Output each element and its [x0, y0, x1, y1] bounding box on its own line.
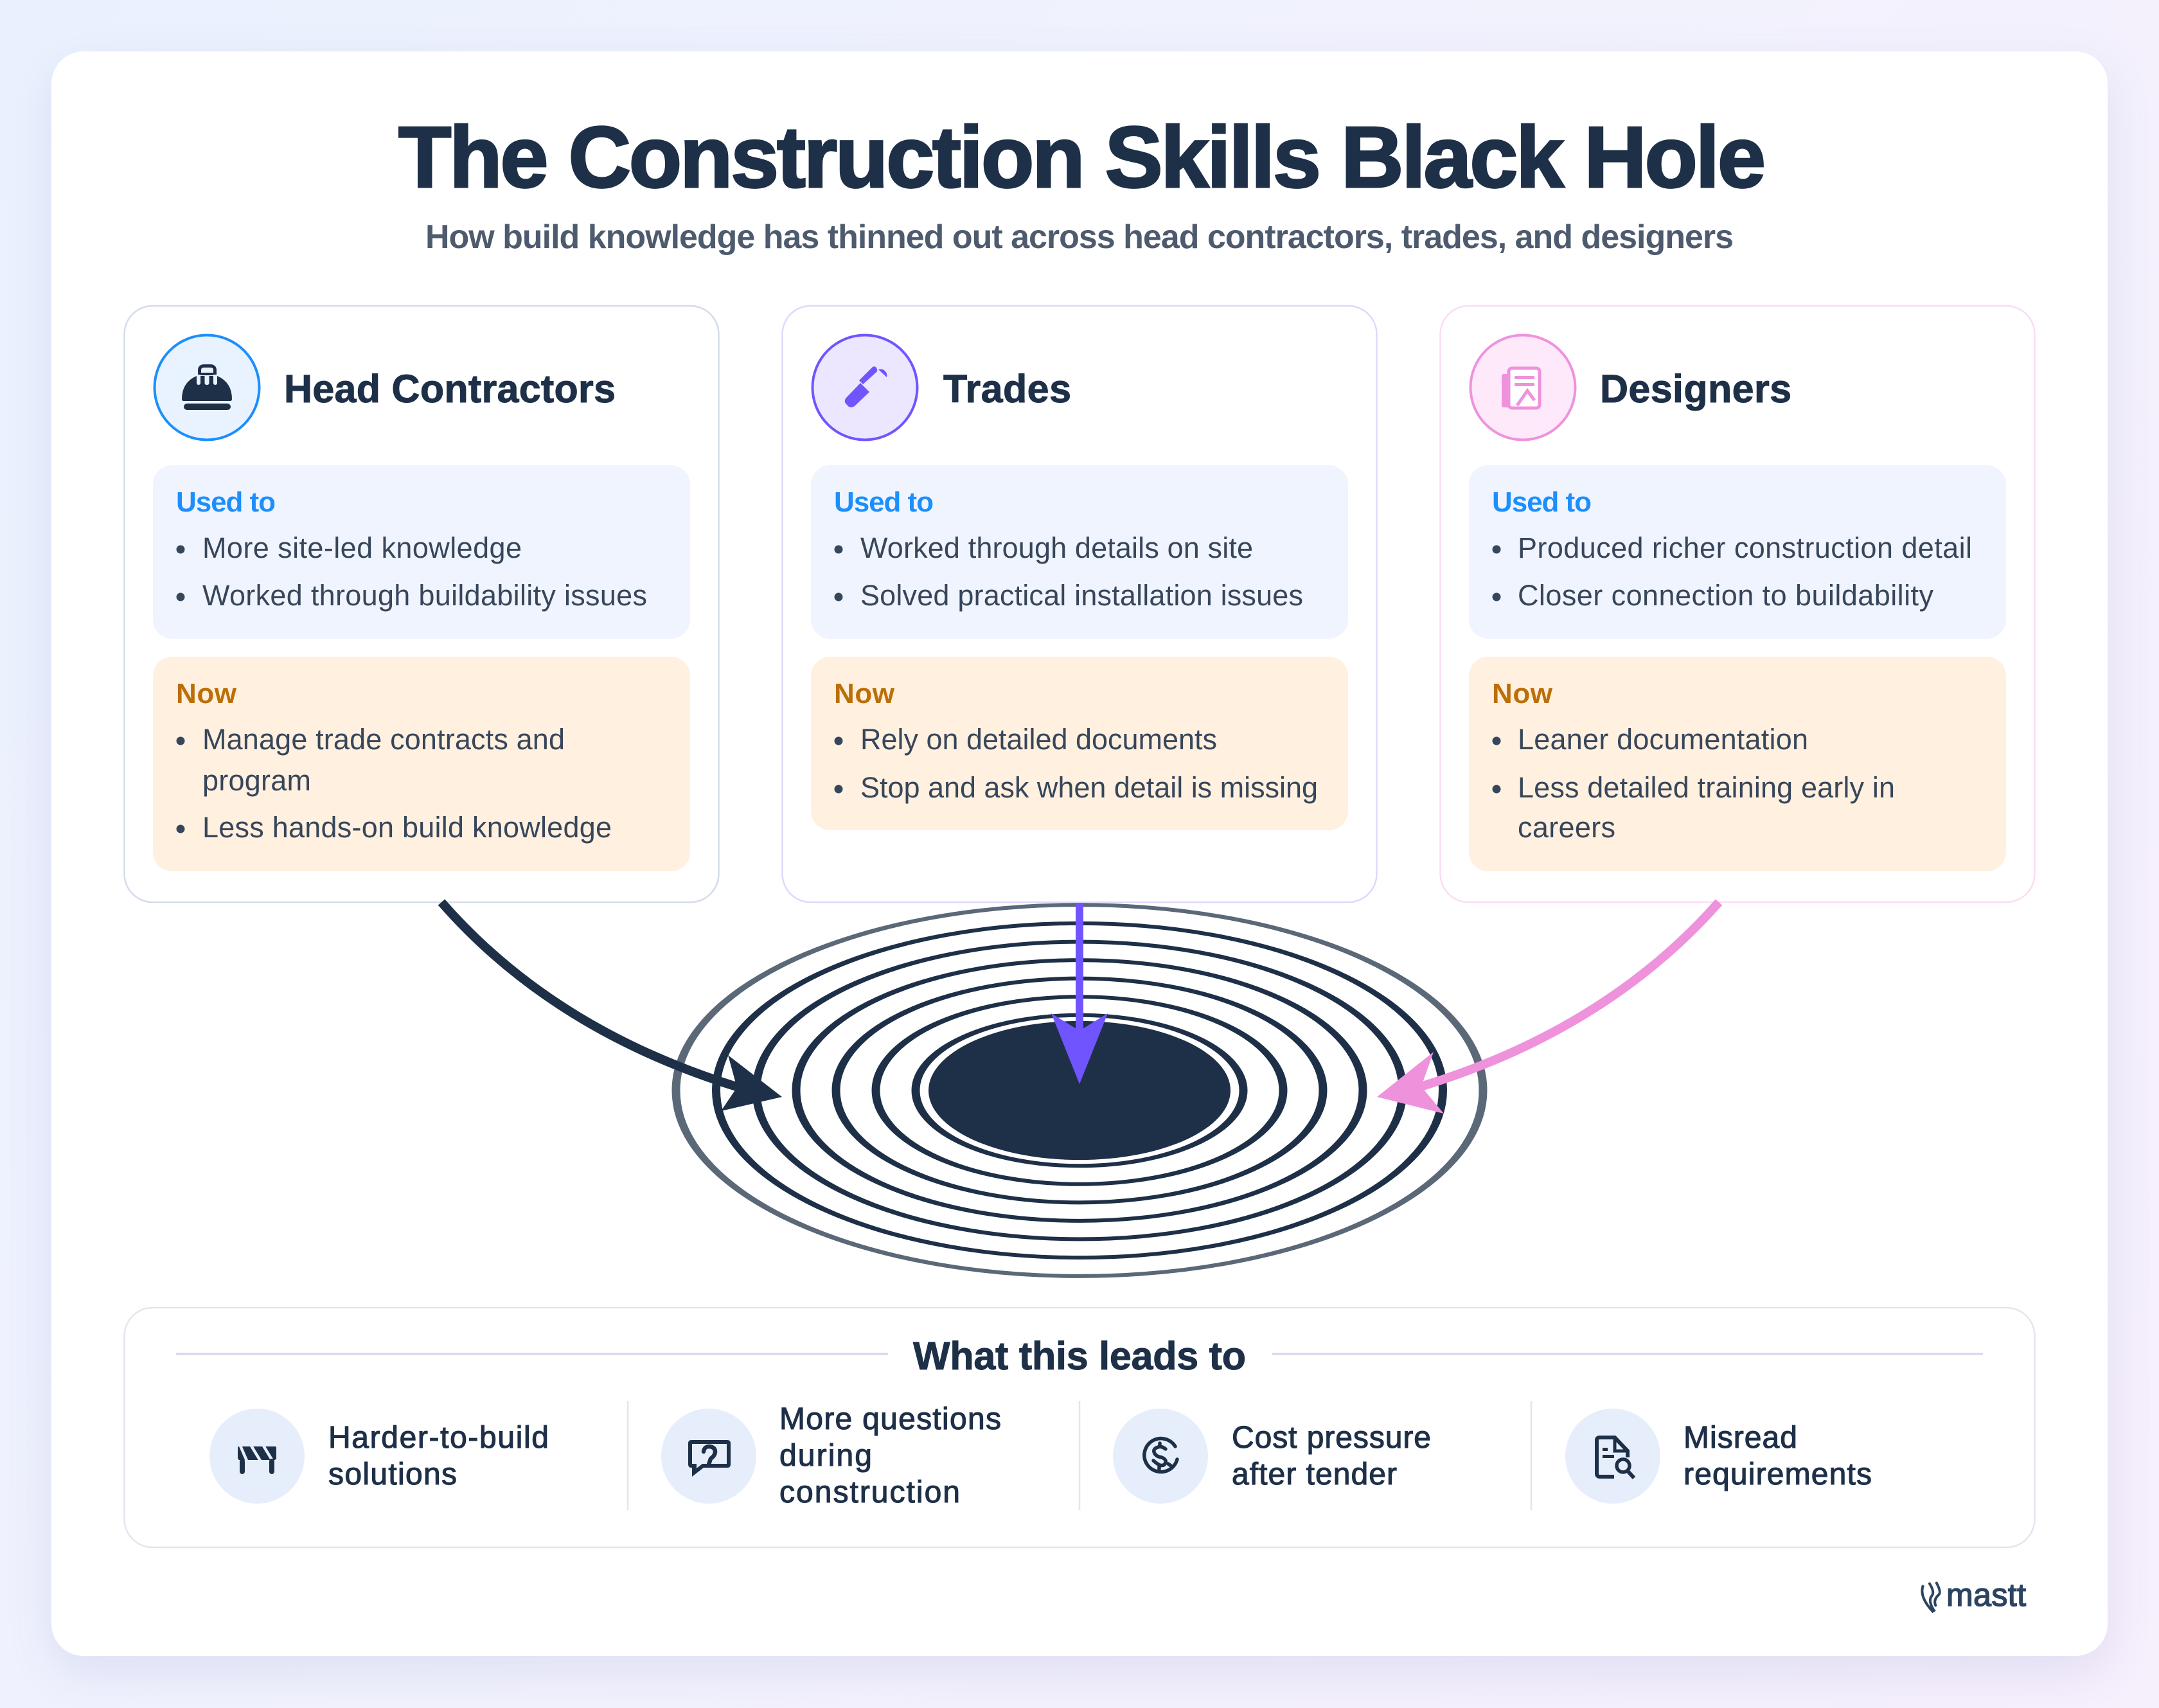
used to box: Used to: [1492, 486, 1592, 518]
used to box: Worked through details on site: [860, 531, 1253, 564]
arrow: designers into black hole: [1377, 902, 1719, 1114]
used to box: Solved practical installation issues: [860, 579, 1303, 612]
arrow: trades into black hole: [1051, 903, 1108, 1084]
icon: hard hat: [154, 335, 260, 440]
outcome: harder to build: solutions: [328, 1457, 457, 1491]
outcome: cost pressure: [1113, 1409, 1431, 1504]
now box: careers: [1518, 811, 1615, 844]
used to box: [1469, 465, 2006, 639]
outcome: more questions: construction: [779, 1475, 960, 1509]
arrow: head contractors into black hole: [441, 902, 782, 1111]
icon: drawing document: [1470, 335, 1576, 440]
outcome: harder to build: Harder-to-build: [328, 1421, 549, 1455]
now box: Manage trade contracts and: [202, 723, 565, 756]
panel: head contractors: [125, 306, 718, 902]
now box: [153, 657, 690, 871]
now box: [811, 657, 1348, 830]
used to box: [153, 465, 690, 639]
now box: Now: [176, 678, 237, 709]
logo: mastt: mastt: [1946, 1577, 2026, 1613]
used to box: Used to: [176, 486, 276, 518]
now box: program: [202, 764, 311, 797]
icon: trowel tool: [812, 335, 918, 440]
now box: Less hands-on build knowledge: [202, 811, 612, 844]
title: The Construction Skills Black Hole: [398, 109, 1766, 206]
heading: trades: Trades: [943, 367, 1071, 411]
black hole graphic: [676, 905, 1483, 1276]
now box: Rely on detailed documents: [860, 723, 1217, 756]
heading: what this leads to: What this leads to: [913, 1334, 1246, 1378]
outcome: more questions: during: [779, 1439, 872, 1473]
panel: trades: [783, 306, 1376, 902]
panel: designers: [1441, 306, 2034, 902]
used to box: More site-led knowledge: [202, 531, 522, 564]
outcome: misread requirements: requirements: [1684, 1457, 1872, 1491]
used to box: Used to: [834, 486, 934, 518]
used to box: [811, 465, 1348, 639]
outcome: harder to build: [209, 1409, 549, 1504]
now box: Less detailed training early in: [1518, 771, 1895, 804]
outcome: misread requirements: Misread: [1684, 1421, 1797, 1455]
now box: Now: [834, 678, 895, 709]
outcome: cost pressure: after tender: [1232, 1457, 1397, 1491]
outcome: cost pressure: Cost pressure: [1232, 1421, 1431, 1455]
used to box: Closer connection to buildability: [1518, 579, 1934, 612]
outcome: more questions: More questions: [779, 1402, 1001, 1436]
now box: Now: [1492, 678, 1553, 709]
now box: Stop and ask when detail is missing: [860, 771, 1318, 804]
outcome: more questions: [661, 1402, 1001, 1509]
heading: head contractors: Head Contractors: [284, 367, 616, 411]
panel: what this leads to: [125, 1308, 2034, 1547]
now box: [1469, 657, 2006, 871]
outcome: misread requirements: [1565, 1409, 1872, 1504]
used to box: Produced richer construction detail: [1518, 531, 1972, 564]
used to box: Worked through buildability issues: [202, 579, 647, 612]
now box: Leaner documentation: [1518, 723, 1808, 756]
heading: designers: Designers: [1600, 367, 1791, 411]
subtitle: How build knowledge has thinned out across head contractors, trades, and designers: [425, 218, 1734, 256]
